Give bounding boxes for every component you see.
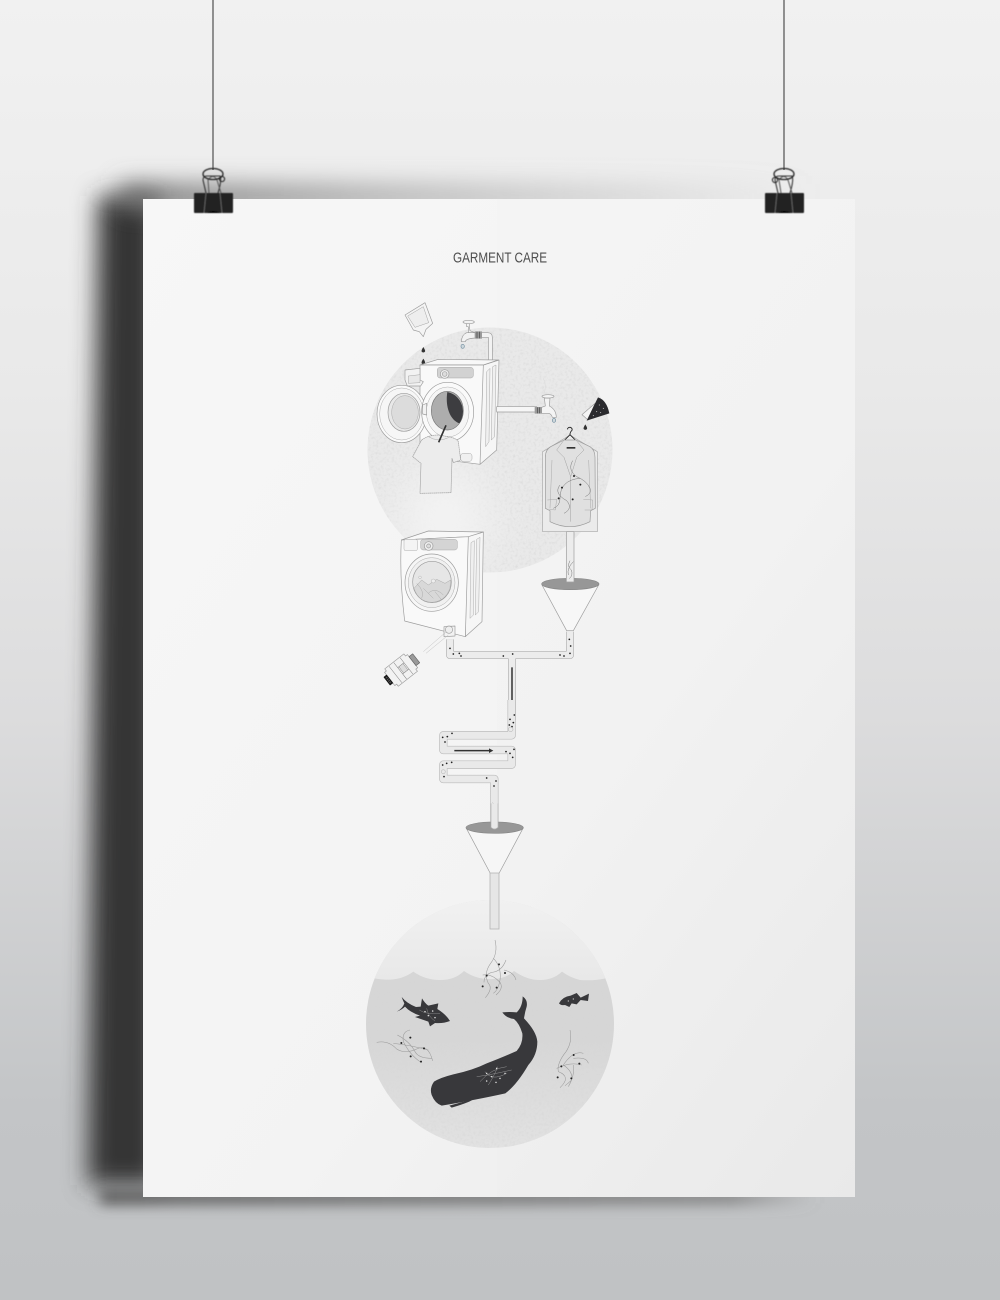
drain port	[444, 626, 455, 637]
poster bottom shadow	[100, 1190, 815, 1204]
illustration: drainage stage	[380, 531, 599, 720]
washer door	[377, 385, 426, 443]
line from port to filter	[423, 632, 448, 653]
binder clip right	[765, 168, 804, 213]
poster left drop shadow	[88, 196, 160, 1185]
microfibres from pipe	[482, 940, 516, 998]
icon: top water tap	[461, 320, 492, 360]
illustration: washing stage	[377, 303, 609, 532]
arrow: down	[510, 667, 514, 709]
drain pipes	[449, 632, 572, 720]
washer opening	[422, 382, 474, 442]
outflow pipe	[490, 873, 499, 929]
icon: right water tap	[535, 378, 556, 422]
top grey circle	[368, 328, 612, 575]
bottom ocean circle	[366, 900, 614, 1148]
icon: tuna	[397, 997, 450, 1026]
icon: jacket in garment bag	[543, 427, 597, 532]
hanging wire right	[783, 0, 785, 170]
icon: open washing machine	[377, 359, 499, 464]
connecting pipe to right tap	[497, 407, 537, 412]
arrow: into washer	[439, 425, 446, 442]
icon: second washing machine	[401, 531, 483, 637]
poster sheet	[143, 199, 855, 1197]
serpentine pipe	[441, 700, 515, 827]
fibres in garment pipe	[568, 561, 573, 579]
poster top shadow	[120, 184, 810, 210]
sky area above waves	[375, 900, 605, 980]
illustration: serpentine pipe and third funnel	[441, 700, 515, 827]
microfibres right cluster	[557, 1030, 588, 1088]
hanging wire left	[212, 0, 214, 170]
pipe from garment bag into funnel	[566, 532, 574, 582]
icon: second funnel	[542, 578, 599, 631]
icon: t-shirt	[413, 435, 461, 493]
icon: sperm whale	[431, 996, 537, 1108]
icon: filter capsule	[380, 650, 423, 690]
third funnel	[466, 803, 523, 874]
arrow: right	[454, 748, 493, 753]
microfibres left cluster	[377, 1030, 433, 1063]
icon: detergent bottle	[405, 303, 433, 364]
binder clip left	[194, 168, 233, 213]
icon: solvent paper cone	[582, 397, 609, 430]
icon: small fish	[559, 993, 589, 1007]
title: GARMENT CARE	[453, 250, 547, 266]
illustration: ocean creatures	[377, 940, 589, 1108]
